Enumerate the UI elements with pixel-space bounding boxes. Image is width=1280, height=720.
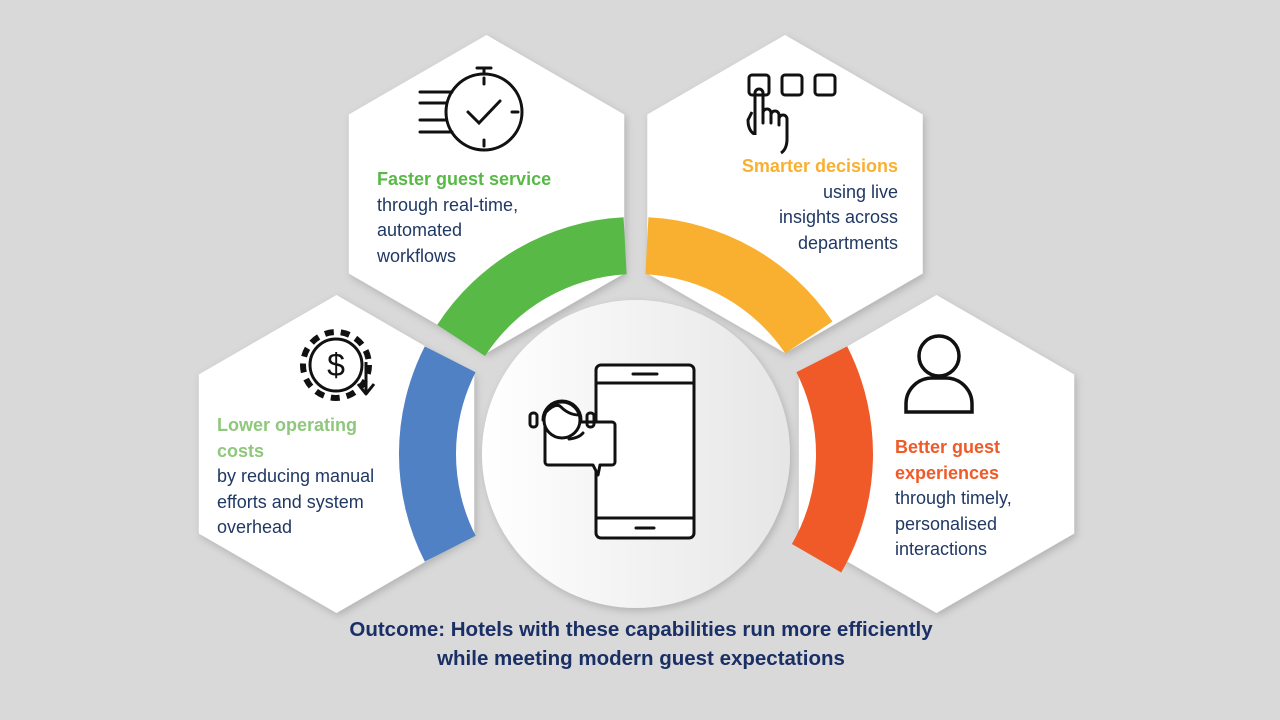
text: smarter decisions: Smarter decisions xyxy=(742,156,898,176)
text: smarter decisions: using live xyxy=(823,182,898,202)
text: better guest experiences: experiences xyxy=(895,463,999,483)
outcome statement: while meeting modern guest expectations xyxy=(436,647,845,670)
text: smarter decisions: insights across xyxy=(779,207,898,227)
text: better guest experiences: interactions xyxy=(895,539,987,559)
text: lower operating costs: costs xyxy=(217,441,264,461)
icon: person xyxy=(906,336,972,412)
text: faster guest service: automated xyxy=(377,220,462,240)
center circle xyxy=(482,300,790,608)
hexagon: faster guest service xyxy=(349,35,624,353)
text: better guest experiences: Better guest xyxy=(895,437,1000,457)
text: lower operating costs: efforts and system xyxy=(217,492,364,512)
text: faster guest service: workflows xyxy=(376,246,456,266)
hexagon: better guest experiences xyxy=(799,295,1074,613)
text: lower operating costs: overhead xyxy=(217,517,292,537)
text: smarter decisions: departments xyxy=(798,233,898,253)
text: better guest experiences: through timely, xyxy=(895,488,1012,508)
icon: hand pressing buttons xyxy=(748,75,835,153)
text: faster guest service: through real-time, xyxy=(377,195,518,215)
icon: gear dollar: $ xyxy=(327,347,345,383)
text: better guest experiences: personalised xyxy=(895,514,997,534)
arc: green xyxy=(437,217,627,356)
text: lower operating costs: Lower operating xyxy=(217,415,357,435)
text: faster guest service: Faster guest service xyxy=(377,169,551,189)
arc: blue xyxy=(399,346,476,562)
hexagon: lower operating costs xyxy=(199,295,474,613)
text: lower operating costs: by reducing manual xyxy=(217,466,374,486)
arc: red xyxy=(792,346,873,572)
icon: gear dollar xyxy=(303,332,374,398)
icon: phone with support agent xyxy=(530,365,694,538)
icon: stopwatch xyxy=(420,68,522,150)
outcome statement: Outcome: Hotels with these capabilities run more efficiently xyxy=(349,618,933,641)
hexagon: smarter decisions xyxy=(647,35,923,353)
arc: orange xyxy=(645,217,832,353)
